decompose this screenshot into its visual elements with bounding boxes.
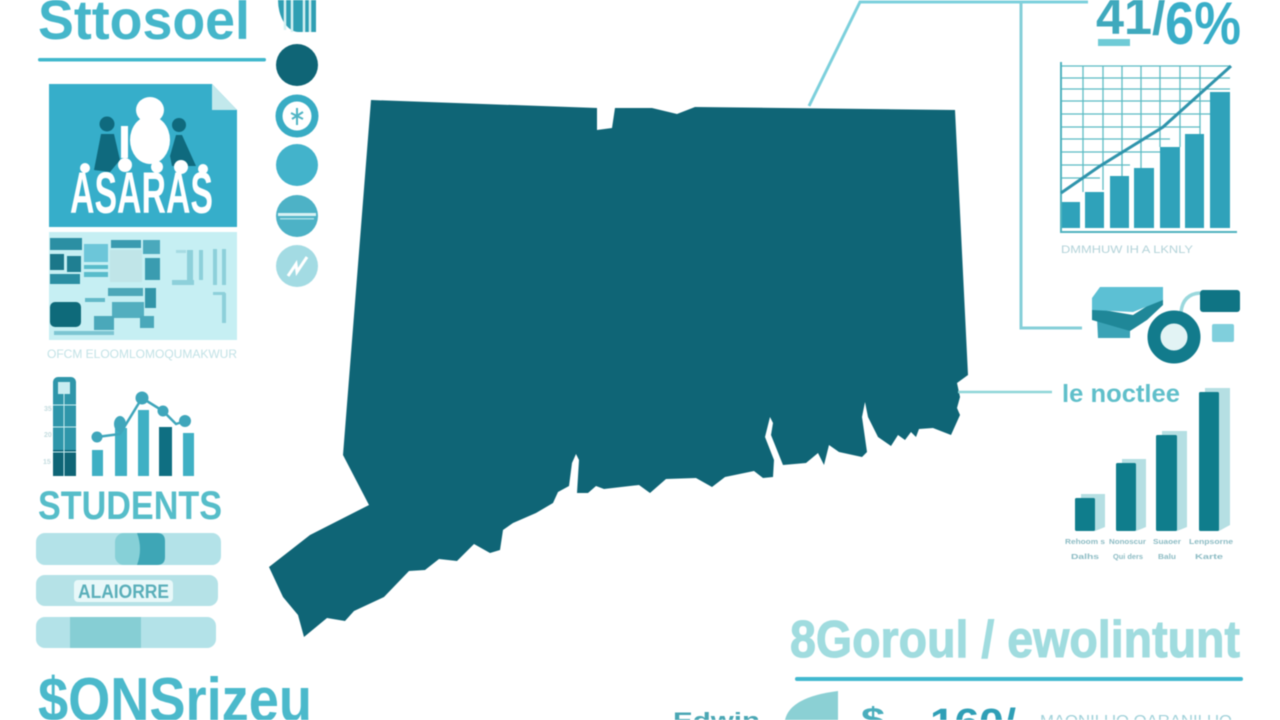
heading rule	[38, 58, 266, 62]
chart: growth bars	[1061, 62, 1237, 256]
connector: top diagonal	[809, 2, 1088, 106]
bar labels: Karte	[1195, 552, 1223, 561]
panel: map thumbnail	[49, 232, 237, 340]
machine top	[1092, 287, 1163, 312]
pale block	[1212, 324, 1234, 342]
document fold	[212, 84, 237, 110]
document background	[49, 84, 237, 227]
connector: right bracket	[1021, 2, 1082, 328]
bottom stat row	[673, 691, 1232, 720]
card title: ASARAS	[70, 161, 213, 226]
icon column	[276, 0, 318, 287]
connector tube	[1181, 293, 1200, 312]
bar labels: Nonoscur	[1109, 537, 1146, 546]
icon: striped partial circle	[278, 0, 316, 32]
bars	[92, 410, 194, 476]
wheel	[1154, 317, 1194, 357]
icon: dark circle	[276, 44, 318, 86]
machine dark band	[1092, 296, 1163, 331]
heading: students: STUDENTS	[38, 484, 222, 528]
heading: bottom right: 8Goroul / ewolintunt	[790, 611, 1240, 669]
trend line	[1061, 66, 1231, 193]
icon: banded circle	[276, 195, 318, 237]
bar two	[36, 575, 218, 606]
axis labels: 15	[43, 459, 51, 466]
axis labels	[43, 406, 52, 466]
icon: dark figures	[94, 116, 196, 172]
progress bars	[36, 533, 221, 648]
thumbnail tiles	[50, 238, 226, 335]
chart caption: DMMHUW IH A LKNLY	[1061, 244, 1194, 256]
bar labels: Lenpsorne	[1189, 537, 1233, 546]
bar labels: Rehoom s	[1065, 537, 1105, 546]
bar labels: Dalhs	[1071, 552, 1099, 561]
thumbnail background	[49, 232, 237, 340]
bar labels: Qui ders	[1113, 552, 1143, 561]
panel: document card	[49, 84, 237, 227]
chart: students bars	[43, 377, 194, 476]
bar two: ALAIORRE	[78, 582, 169, 603]
tall stacked bar	[53, 377, 76, 476]
icon: pale circle with check	[276, 245, 318, 287]
axis labels: 20	[44, 432, 52, 439]
dark block	[1200, 290, 1240, 312]
chart label: le noctlee	[1062, 380, 1180, 408]
axis labels: 35	[44, 406, 52, 413]
axes	[1061, 62, 1237, 232]
chart: increasing bars	[1065, 388, 1233, 561]
connector lines	[809, 2, 1088, 392]
icon: white figures	[80, 97, 208, 174]
trend figures	[92, 392, 191, 442]
icon: ring with plant	[276, 94, 318, 138]
bar labels: Suaoer	[1153, 537, 1181, 546]
bar three	[36, 617, 216, 648]
bar labels	[1065, 537, 1233, 561]
connector: mid callout	[958, 391, 1052, 393]
bars	[1061, 92, 1230, 228]
pie wedge	[785, 691, 838, 720]
bottom rule	[795, 677, 1243, 681]
bar labels: Balu	[1158, 552, 1176, 561]
bar shadows	[1081, 388, 1230, 531]
bar one	[36, 533, 221, 565]
bars	[1075, 392, 1219, 531]
thumbnail caption: OFCM ELOOMLOMOQUMAKWUR	[47, 347, 237, 361]
stat: percentage	[1096, 0, 1241, 57]
icon: machine with wheel	[1092, 287, 1240, 357]
grid	[1061, 66, 1230, 192]
icon: plain circle	[276, 144, 318, 186]
machine lower block	[1097, 318, 1130, 338]
panel: top-left heading	[38, 0, 266, 62]
state map silhouette	[269, 100, 968, 637]
